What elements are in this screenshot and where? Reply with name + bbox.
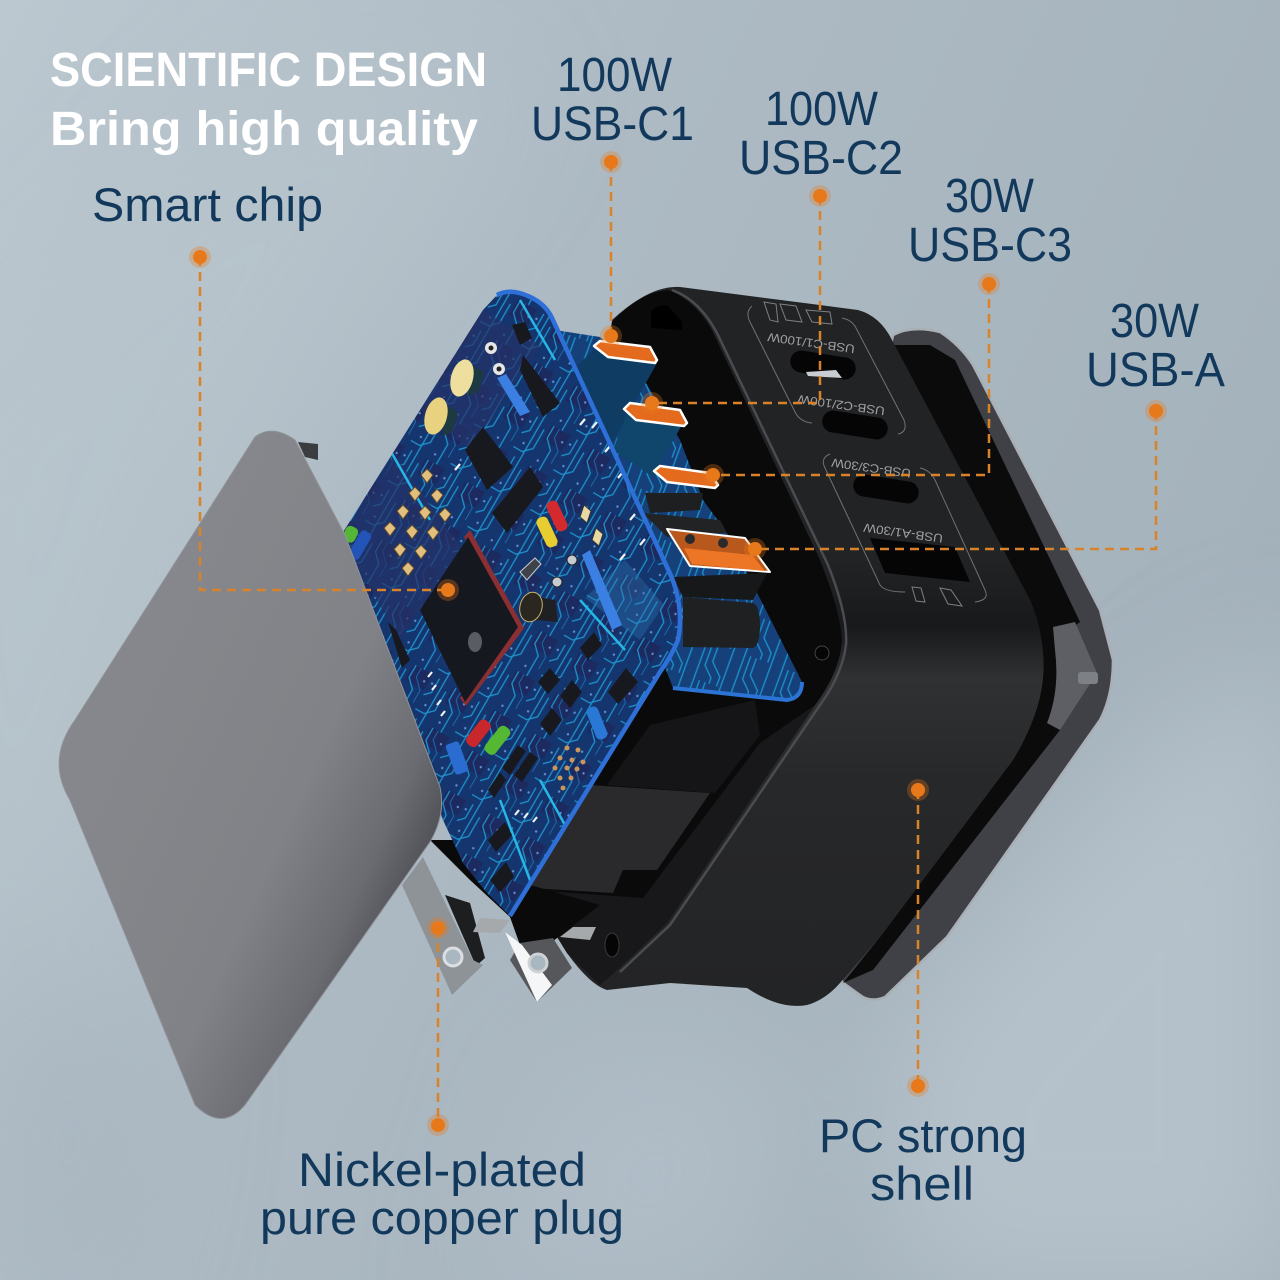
blue connectors bbox=[497, 374, 622, 630]
mount hole upper bbox=[651, 306, 682, 330]
label: nickel-plated plug bbox=[260, 1143, 624, 1244]
interior lower block bbox=[530, 785, 710, 893]
black cylinder bbox=[683, 597, 760, 648]
label: 30W USB-C3: USB-C3 bbox=[908, 219, 1072, 272]
label: smart chip: Smart chip bbox=[92, 178, 323, 231]
label: nickel-plated plug: Nickel-plated bbox=[298, 1143, 586, 1196]
body rim highlight bbox=[620, 290, 846, 972]
right blade bbox=[505, 927, 596, 1002]
label: 100W USB-C1: 100W bbox=[557, 49, 673, 102]
label: 100W USB-C2: 100W bbox=[765, 83, 879, 136]
gold pads bbox=[384, 469, 451, 576]
title: Bring high quality bbox=[50, 103, 478, 156]
USB-A module bbox=[667, 529, 770, 600]
label: PC strong shell: PC strong bbox=[819, 1109, 1027, 1162]
plug blades bbox=[402, 857, 596, 1002]
charger rear shell bbox=[800, 329, 1113, 1000]
IC chips bbox=[388, 322, 638, 892]
navy regions bbox=[340, 310, 540, 640]
port face markings bbox=[748, 302, 986, 606]
pale blue regions bbox=[585, 560, 664, 640]
label: 30W USB-A: USB-A bbox=[1086, 344, 1225, 397]
USB-C1 port opening bbox=[789, 349, 857, 381]
plate tab bbox=[298, 442, 318, 460]
callout: plug bbox=[427, 917, 449, 1136]
callout: USB-A bbox=[744, 400, 1167, 560]
left blade bbox=[402, 857, 510, 995]
small solder dots bbox=[552, 746, 586, 790]
callout: PC shell bbox=[907, 779, 929, 1097]
USB-C2 port opening bbox=[821, 409, 889, 441]
label: 30W USB-A bbox=[1086, 295, 1225, 397]
title: SCIENTIFIC DESIGN bbox=[50, 44, 487, 97]
interior upper block bbox=[607, 700, 760, 793]
coloured components bbox=[341, 499, 609, 775]
screw hole bottom bbox=[605, 933, 619, 957]
main chip bbox=[420, 530, 524, 706]
interior floor bbox=[530, 705, 815, 985]
USB-C3 module bbox=[645, 466, 718, 513]
port outlines bbox=[748, 306, 986, 602]
label: 100W USB-C1: USB-C1 bbox=[531, 98, 694, 151]
label: 30W USB-C3: 30W bbox=[945, 170, 1035, 223]
callout: USB-C3 bbox=[702, 273, 1000, 486]
label: PC strong shell: shell bbox=[870, 1157, 974, 1210]
label USB-C3/30W: USB-C3/30W bbox=[830, 455, 912, 480]
label USB-A1/30W: USB-A1/30W bbox=[862, 520, 944, 545]
white specks bbox=[428, 419, 645, 822]
label: PC strong shell bbox=[819, 1109, 1027, 1210]
label: 30W USB-C3 bbox=[908, 170, 1072, 272]
USB-C1 module bbox=[573, 341, 657, 447]
white through-holes bbox=[485, 342, 505, 375]
black barrel bbox=[643, 513, 727, 537]
charger black body bbox=[525, 287, 1043, 1006]
label USB-C2/100W: USB-C2/100W bbox=[796, 392, 886, 418]
diagonal cyan bars bbox=[390, 300, 625, 880]
device icons bbox=[764, 302, 962, 606]
shell tab bbox=[1078, 672, 1098, 684]
rear circuit board with ports bbox=[555, 330, 802, 700]
USB-C1 silver tongue bbox=[806, 370, 842, 378]
shell inner gap bbox=[843, 345, 1080, 983]
black capacitor bbox=[516, 590, 558, 624]
callout: USB-C1 bbox=[600, 151, 622, 347]
USB-C2 module bbox=[613, 403, 687, 477]
label USB-C1/100W: USB-C1/100W bbox=[766, 330, 856, 356]
callout: smart chip bbox=[189, 246, 459, 601]
screw hole right bbox=[815, 646, 829, 660]
label: nickel-plated plug: pure copper plug bbox=[260, 1191, 624, 1244]
plug mount block bbox=[430, 840, 600, 945]
gold capacitors bbox=[420, 357, 484, 437]
main circuit board bbox=[340, 292, 680, 916]
label: 100W USB-C2 bbox=[739, 83, 903, 185]
label: 100W USB-C2: USB-C2 bbox=[739, 132, 903, 185]
label: 100W USB-C1 bbox=[531, 49, 694, 151]
title bbox=[50, 44, 487, 156]
label: 30W USB-A: 30W bbox=[1110, 295, 1200, 348]
callout: USB-C2 bbox=[641, 185, 831, 414]
USB-C3 port opening bbox=[852, 473, 920, 505]
grey cover plate bbox=[59, 431, 442, 1118]
shell grey inner piece bbox=[1047, 622, 1097, 730]
small silver parts bbox=[520, 505, 603, 587]
body open interior bbox=[525, 290, 842, 985]
USB-A port opening bbox=[870, 538, 970, 582]
